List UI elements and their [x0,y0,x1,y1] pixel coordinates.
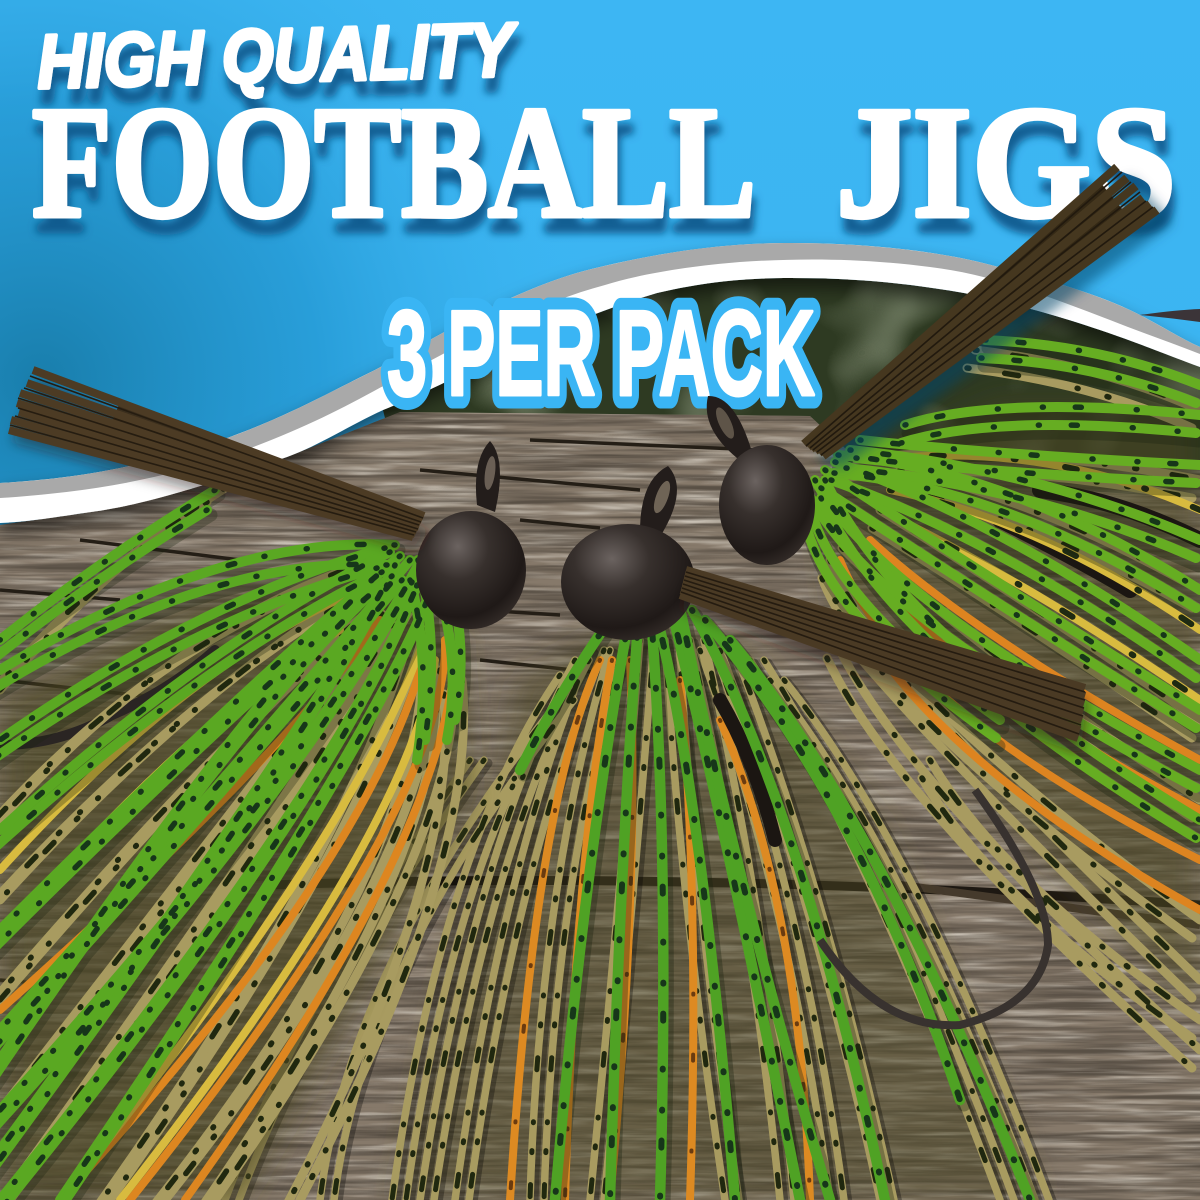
background: wooden planks [0,412,1200,1200]
jig head: right [707,396,815,565]
small hook tip top right [1140,309,1200,322]
headline: FOOTBALL JIGS: FOOTBALL [32,73,756,251]
jig: centre skirt [225,600,1053,1200]
background: blue sky panel [0,0,1200,560]
brush guard: right [804,167,1173,469]
brush guard: centre [680,570,1087,754]
badge: 3 PER PACK [387,285,815,421]
wave swoosh: white band [0,243,1200,523]
jig: left skirt [0,488,470,1200]
wave swoosh: grey edge [0,243,1200,498]
badge: 3 PER PACK: 3 PER PACK [387,285,815,421]
jig head: centre [561,466,695,640]
jig: right skirt [804,340,1200,1068]
background: dark green photo inside wave [383,278,1200,462]
brush guard: left [9,370,429,552]
badge: 3 PER PACK: 3 PER PACK [387,285,815,421]
hook: large bottom right [820,790,1048,1025]
headline: HIGH QUALITY: HIGH QUALITY [36,7,520,105]
headline: FOOTBALL JIGS: JIGS [836,73,1176,251]
jig head: left [416,441,526,629]
